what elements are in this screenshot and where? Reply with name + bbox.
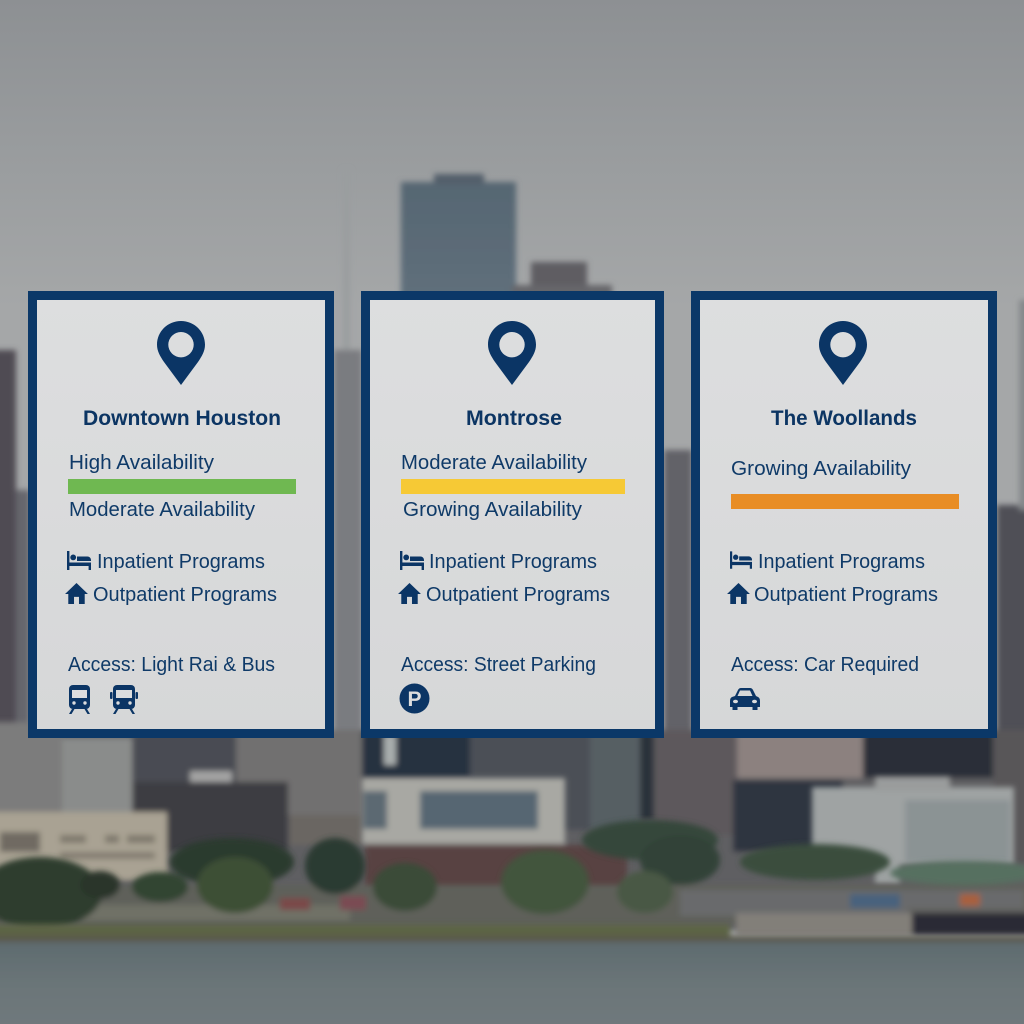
icon: house xyxy=(398,583,421,604)
label: Inpatient Programs: Inpatient Programs xyxy=(429,551,597,573)
label: Inpatient Programs: Inpatient Programs xyxy=(97,551,265,573)
panel: Downtown Houston xyxy=(32,296,330,734)
label: Moderate Availability: Moderate Availability xyxy=(69,499,255,521)
card frame xyxy=(32,296,330,734)
label: Outpatient Programs: Outpatient Programs xyxy=(426,584,610,606)
icon: bed xyxy=(400,551,424,570)
label: Outpatient Programs: Outpatient Programs xyxy=(754,584,938,606)
panel: The Woollands xyxy=(696,296,992,734)
icon: bed xyxy=(730,551,752,569)
label: Inpatient Programs: Inpatient Programs xyxy=(758,551,925,573)
availability bar: green xyxy=(68,479,296,494)
icon: parking: P xyxy=(407,688,422,711)
icon: train xyxy=(69,685,90,714)
label: High Availability: High Availability xyxy=(69,452,214,474)
icon: bus xyxy=(110,685,138,714)
icon: location pin xyxy=(157,321,205,385)
card frame xyxy=(366,296,660,734)
icon: parking xyxy=(400,684,430,714)
heading: Downtown Houston: Downtown Houston xyxy=(83,407,281,430)
heading: Montrose: Montrose xyxy=(466,407,562,430)
panel: Montrose xyxy=(366,296,660,734)
heading: The Woollands: The Woollands xyxy=(771,407,917,430)
icon: house xyxy=(65,583,88,604)
icon: location pin xyxy=(488,321,536,385)
card frame xyxy=(696,296,992,734)
label: Outpatient Programs: Outpatient Programs xyxy=(93,584,277,606)
availability bar: orange xyxy=(731,494,959,509)
icon: house xyxy=(727,583,750,604)
icon: bed xyxy=(67,551,91,570)
availability bar: yellow xyxy=(401,479,625,494)
label: access: Access: Street Parking xyxy=(401,654,596,676)
label: Moderate Availability: Moderate Availability xyxy=(401,452,587,474)
label: Growing Availability: Growing Availability xyxy=(731,458,911,480)
label: access: Access: Light Rai & Bus xyxy=(68,654,275,676)
label: access: Access: Car Required xyxy=(731,654,919,676)
icon: car xyxy=(730,688,760,710)
icon: location pin xyxy=(819,321,867,385)
label: Growing Availability: Growing Availability xyxy=(403,499,582,521)
